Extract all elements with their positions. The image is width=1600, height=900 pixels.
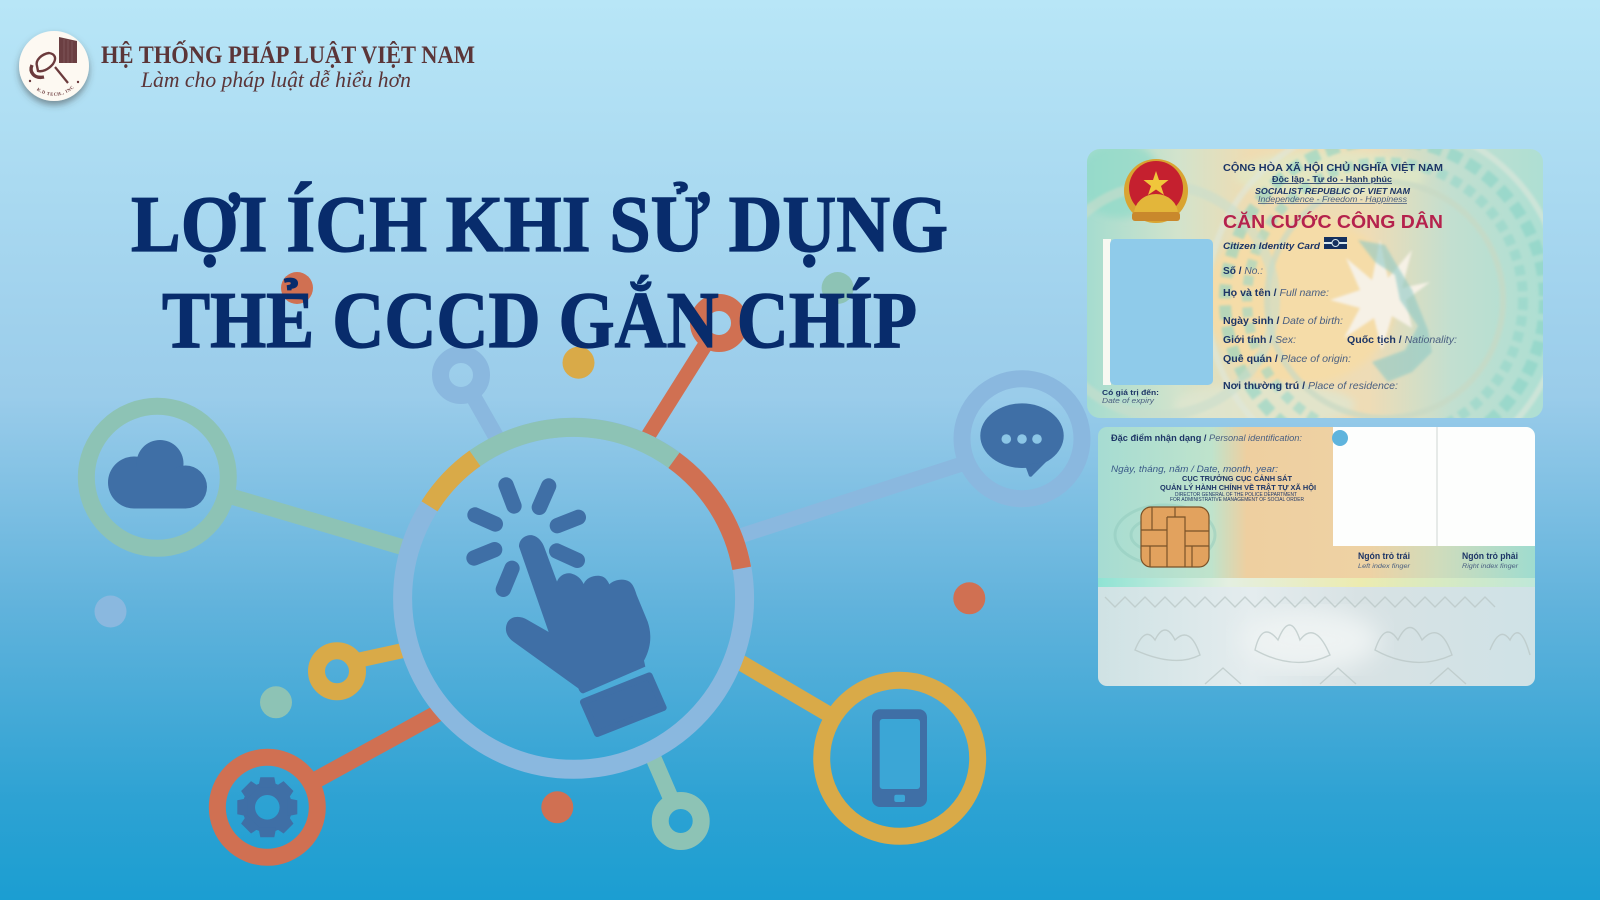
- spoke: cloud: [233, 497, 402, 547]
- node: phone ring: [822, 680, 978, 836]
- node: gear ring: [217, 757, 317, 857]
- title: THẺ CCCD GẮN CHÍP: [162, 275, 917, 365]
- node: chat ring: [962, 379, 1082, 499]
- spoke: top-left blue ring: [471, 392, 498, 440]
- lotus watermark: [1105, 597, 1530, 684]
- card text: Độc lập - Tự do - Hạnh phúc: [1272, 175, 1393, 184]
- card text: Citizen Identity Card: [1223, 241, 1320, 252]
- card text: Quê quán / Place of origin:: [1223, 353, 1351, 365]
- back text: QUẢN LÝ HÀNH CHÍNH VỀ TRẬT TỰ XÃ HỘI: [1160, 482, 1316, 492]
- node: bottom green ring: [660, 800, 701, 842]
- card text: SOCIALIST REPUBLIC OF VIET NAM: [1255, 186, 1411, 196]
- node: top-left blue ring: [440, 354, 482, 396]
- dot: light blue: [94, 596, 126, 628]
- node: cloud ring: [86, 406, 228, 548]
- card text: Ngày sinh / Date of birth:: [1223, 315, 1343, 327]
- back text: Right index finger: [1462, 563, 1519, 570]
- back text: FOR ADMINISTRATIVE MANAGEMENT OF SOCIAL ORDER: [1170, 497, 1304, 503]
- spoke: small yellow ring: [355, 650, 403, 661]
- dot: red upper: [281, 272, 313, 304]
- card text: CĂN CƯỚC CÔNG DÂN: [1223, 211, 1443, 232]
- dot: green upper: [822, 272, 854, 304]
- dot: yellow: [562, 347, 594, 379]
- back text: Đặc điểm nhận dạng / Personal identification:: [1111, 433, 1302, 444]
- title: LỢI ÍCH KHI SỬ DỤNG: [131, 181, 948, 269]
- map watermark: [1358, 240, 1432, 382]
- spoke: phone: [738, 661, 830, 715]
- card text: Quốc tịch / Nationality:: [1347, 334, 1457, 346]
- back text: CỤC TRƯỞNG CỤC CẢNH SÁT: [1182, 474, 1292, 483]
- diagram: hub and spokes: [86, 272, 1082, 857]
- icon: clicking hand: [474, 485, 663, 734]
- ID card: front: [1087, 149, 1543, 418]
- dot: red right: [953, 582, 985, 614]
- photo area: [1103, 239, 1111, 385]
- node: small yellow ring: [316, 651, 358, 692]
- spoke: chat: [740, 464, 962, 536]
- back text: Left index finger: [1358, 563, 1411, 570]
- card text: CỘNG HÒA XÃ HỘI CHỦ NGHĨA VIỆT NAM: [1223, 161, 1443, 174]
- back text: [1111, 433, 1519, 570]
- hub ring: [403, 427, 745, 769]
- card text: Số / No.:: [1223, 265, 1263, 277]
- fingerprint box: [1333, 427, 1535, 546]
- chip: [1141, 507, 1209, 567]
- spoke: top red ring: [648, 340, 708, 436]
- header tagline: Làm cho pháp luật dễ hiểu hơn: [140, 67, 411, 92]
- card text: Date of expiry: [1102, 398, 1155, 405]
- icon: smartphone: [872, 709, 927, 807]
- card text: Giới tính / Sex:: [1223, 334, 1296, 346]
- card text: Có giá trị đến:: [1102, 388, 1159, 397]
- back text: Ngón trỏ trái: [1358, 551, 1410, 561]
- back text: Ngón trỏ phải: [1462, 551, 1518, 561]
- national emblem: [1124, 159, 1188, 223]
- header logo: K.D TECH., INC: [36, 86, 74, 96]
- back text: Ngày, tháng, năm / Date, month, year:: [1111, 464, 1278, 475]
- header organization name: HỆ THỐNG PHÁP LUẬT VIỆT NAM: [101, 40, 475, 69]
- card text: Nơi thường trú / Place of residence:: [1223, 380, 1398, 392]
- card text: Independence - Freedom - Happiness: [1258, 195, 1407, 204]
- icon: gear: [225, 765, 310, 850]
- header logo: [14, 30, 94, 110]
- contactless symbol: [1324, 237, 1347, 249]
- security starburst: [1330, 240, 1430, 350]
- icon: speech bubble: [980, 403, 1064, 477]
- dot: red bottom: [541, 791, 573, 823]
- card text: [1102, 161, 1457, 405]
- title: [131, 181, 948, 365]
- dot: green lower: [260, 686, 292, 718]
- icon: cloud: [108, 440, 207, 508]
- spoke: gear: [315, 713, 438, 780]
- card text: Họ và tên / Full name:: [1223, 287, 1329, 299]
- back text: DIRECTOR GENERAL OF THE POLICE DEPARTMENT: [1175, 492, 1297, 498]
- spoke: bottom green ring: [650, 750, 672, 802]
- ID card: back: [1098, 427, 1535, 686]
- node: top red ring: [698, 302, 740, 344]
